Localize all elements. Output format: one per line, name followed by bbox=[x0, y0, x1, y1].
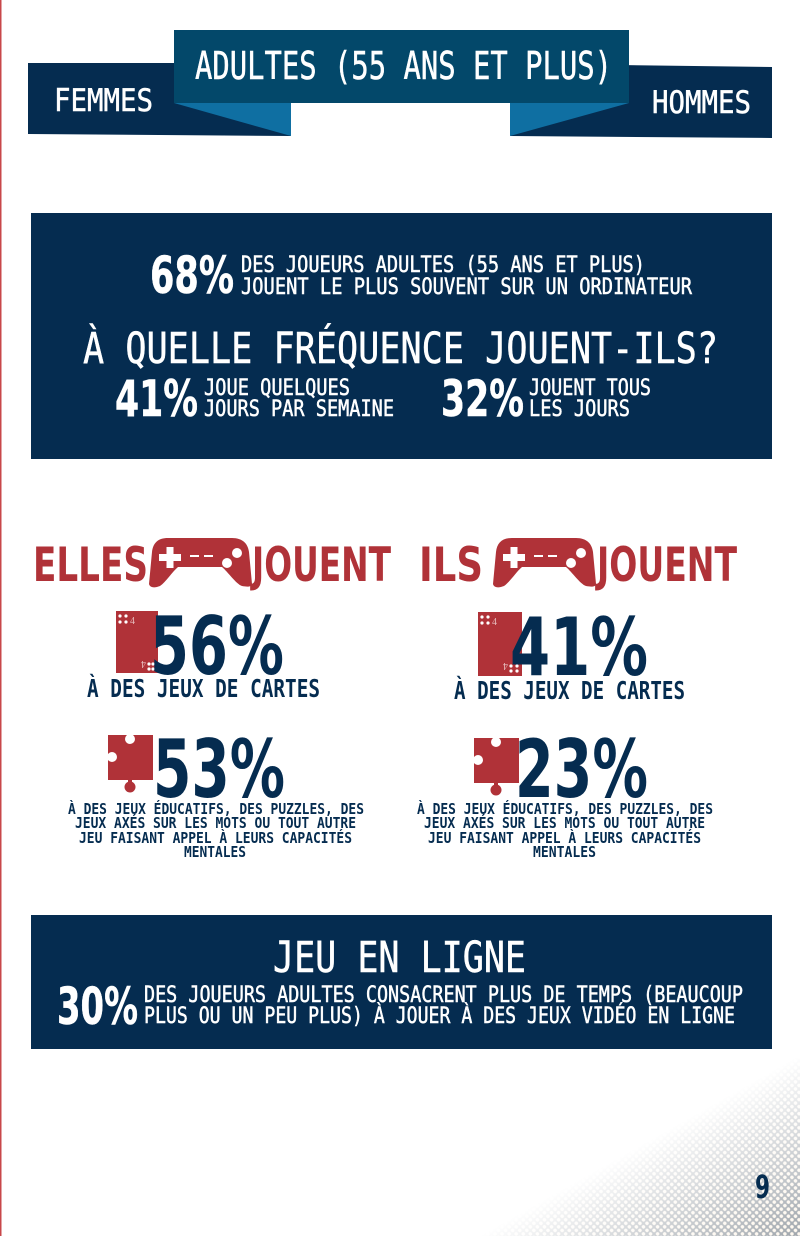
heading: elles jouent: JOUENT bbox=[250, 538, 391, 593]
banner: hommes: HOMMES bbox=[652, 85, 751, 121]
text: jeux éducatifs bbox=[417, 799, 713, 861]
text: quelques jours: JOUE QUELQUES bbox=[204, 376, 350, 401]
label: cartes: À DES JEUX DE CARTES bbox=[87, 674, 320, 703]
heading: elles jouent: ELLES bbox=[33, 538, 148, 593]
icon: manette bbox=[149, 538, 252, 587]
icon: pièce de puzzle bbox=[473, 737, 519, 796]
banner: femmes bbox=[28, 63, 291, 136]
left red edge line bbox=[0, 0, 2, 1236]
column: elles bbox=[33, 538, 391, 861]
text: jeux éducatifs: À DES JEUX ÉDUCATIFS, DES PUZZLES, DES bbox=[68, 799, 364, 818]
text: jeux éducatifs: MENTALES bbox=[533, 843, 596, 861]
text: ordinateur: DES JOUEURS ADULTES (55 ANS ET PLUS) bbox=[241, 253, 645, 278]
icon: pièce de puzzle bbox=[107, 734, 153, 792]
heading: elles jouent bbox=[33, 538, 391, 593]
stat: 32%: 32% bbox=[441, 370, 524, 428]
page number: 9 bbox=[755, 1168, 770, 1206]
icon: carte à jouer: 4 bbox=[492, 617, 497, 628]
stat: 23%: 23% bbox=[515, 723, 648, 816]
text: jeux éducatifs: MENTALES bbox=[184, 843, 246, 861]
stat: 41%: 41% bbox=[115, 370, 198, 428]
icon: manette bbox=[493, 538, 596, 587]
text: jeux éducatifs: JEUX AXÉS SUR LES MOTS OU TOUT AUTRE bbox=[75, 813, 356, 832]
heading: jeu en ligne: JEU EN LIGNE bbox=[273, 933, 526, 983]
stat: 68%: 68% bbox=[150, 247, 234, 306]
stat: 30%: 30% bbox=[57, 978, 138, 1037]
text: quelques jours bbox=[204, 376, 394, 422]
banner: hommes bbox=[510, 65, 772, 138]
panel: fréquence de jeu bbox=[31, 213, 772, 459]
text: jeux éducatifs: JEU FAISANT APPEL À LEURS CAPACITÉS bbox=[79, 828, 352, 847]
text: ordinateur bbox=[241, 253, 693, 300]
text: jeux éducatifs: JEU FAISANT APPEL À LEURS CAPACITÉS bbox=[428, 828, 701, 847]
text: jeu en ligne bbox=[144, 983, 743, 1029]
icon: carte à jouer: 4 bbox=[130, 616, 135, 627]
text: jeux éducatifs: À DES JEUX ÉDUCATIFS, DES PUZZLES, DES bbox=[417, 799, 713, 818]
stat: 41%: 41% bbox=[510, 601, 648, 694]
banner: main title bbox=[174, 30, 629, 103]
column: ils bbox=[417, 538, 737, 861]
text: ordinateur: JOUENT LE PLUS SOUVENT SUR UN ORDINATEUR bbox=[241, 275, 693, 300]
icon: carte à jouer bbox=[116, 611, 158, 673]
halftone corner background bbox=[510, 1072, 800, 1236]
icon: carte à jouer: 4 bbox=[503, 660, 508, 671]
text: tous les jours bbox=[529, 376, 651, 422]
label: cartes: À DES JEUX DE CARTES bbox=[454, 676, 685, 705]
banner: main title: ADULTES (55 ANS ET PLUS) bbox=[195, 44, 612, 88]
heading: ils jouent: ILS bbox=[419, 538, 483, 593]
banner header bbox=[28, 30, 772, 138]
icon: carte à jouer: 4 bbox=[141, 658, 146, 669]
panel: jeu en ligne bbox=[31, 915, 772, 1049]
text: tous les jours: LES JOURS bbox=[529, 397, 630, 422]
text: quelques jours: JOURS PAR SEMAINE bbox=[204, 397, 394, 422]
stat: 53%: 53% bbox=[153, 723, 285, 816]
icon: carte à jouer bbox=[478, 612, 522, 676]
banner: femmes: FEMMES bbox=[54, 83, 153, 119]
text: tous les jours: JOUENT TOUS bbox=[529, 376, 651, 401]
text: jeux éducatifs: JEUX AXÉS SUR LES MOTS OU TOUT AUTRE bbox=[424, 813, 705, 832]
stat: 56%: 56% bbox=[150, 600, 284, 693]
heading: ils jouent: JOUENT bbox=[595, 538, 737, 593]
heading: ils jouent bbox=[419, 538, 737, 593]
text: jeux éducatifs bbox=[68, 799, 364, 861]
